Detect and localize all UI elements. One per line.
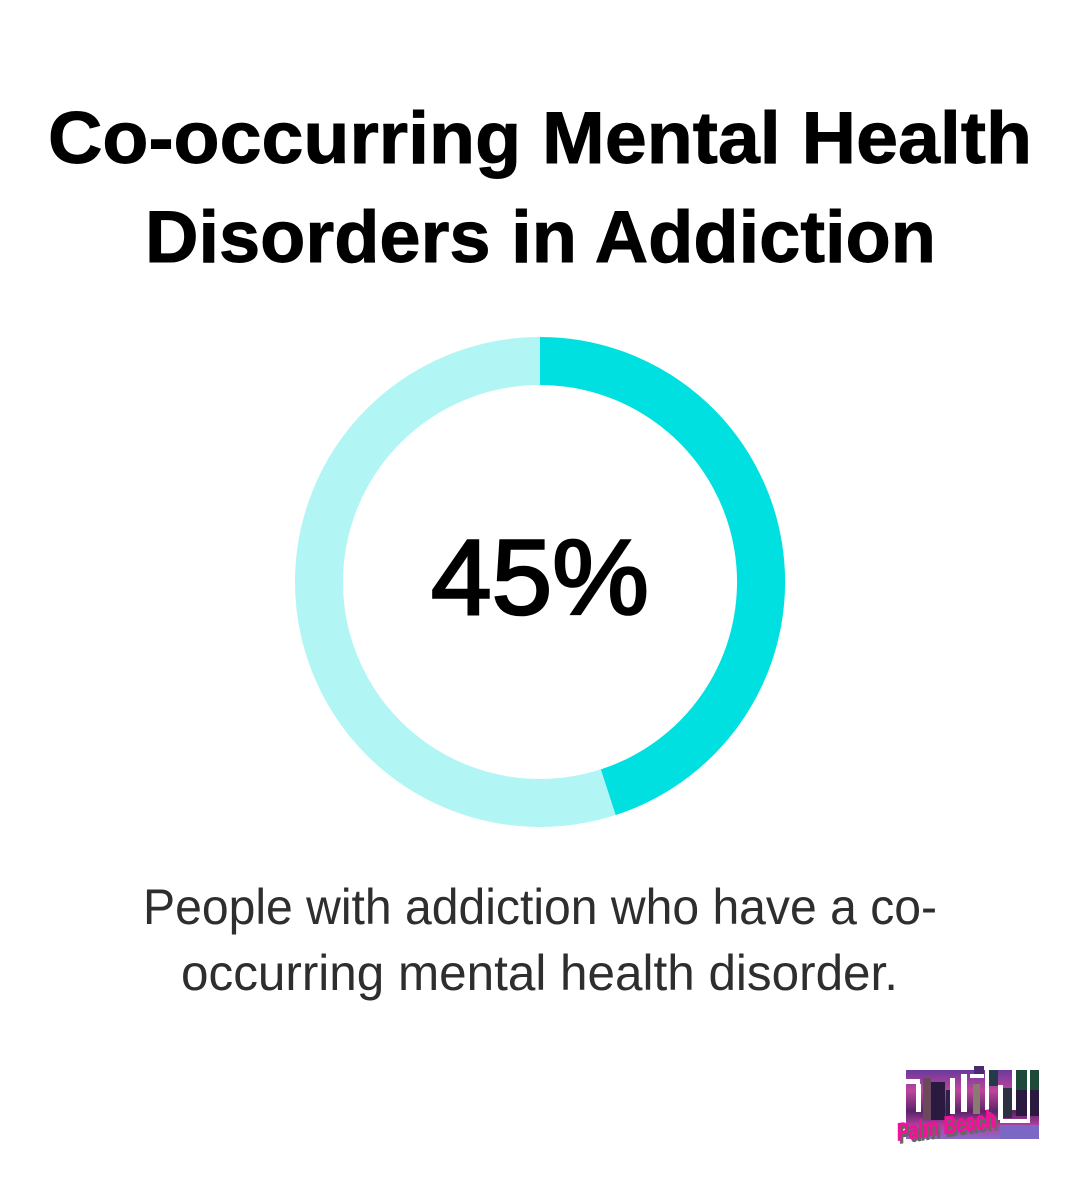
donut chart: 45%: [319, 361, 761, 803]
ring value arc: [540, 361, 761, 792]
description text: People with addiction who have a co-: [143, 879, 937, 935]
logo script: Palm Beach: Palm Beach: [895, 1105, 998, 1147]
logo image background: [906, 1070, 1039, 1139]
logo: Amity Palm Beach: [895, 1066, 1039, 1150]
logo letter cuts: [906, 1066, 1030, 1123]
value: 45%: 45%: [431, 517, 649, 637]
description text: [143, 879, 937, 1001]
ring track: [319, 361, 761, 803]
logo script: Palm Beach: [895, 1105, 1000, 1150]
logo city buildings: [923, 1070, 1039, 1139]
logo script: Palm Beach: Palm Beach: [897, 1108, 1000, 1149]
title: Co-occurring Mental Health: [48, 98, 1032, 179]
description text: occurring mental health disorder.: [181, 945, 898, 1001]
title: Disorders in Addiction: [145, 197, 936, 278]
title: [48, 98, 1032, 278]
